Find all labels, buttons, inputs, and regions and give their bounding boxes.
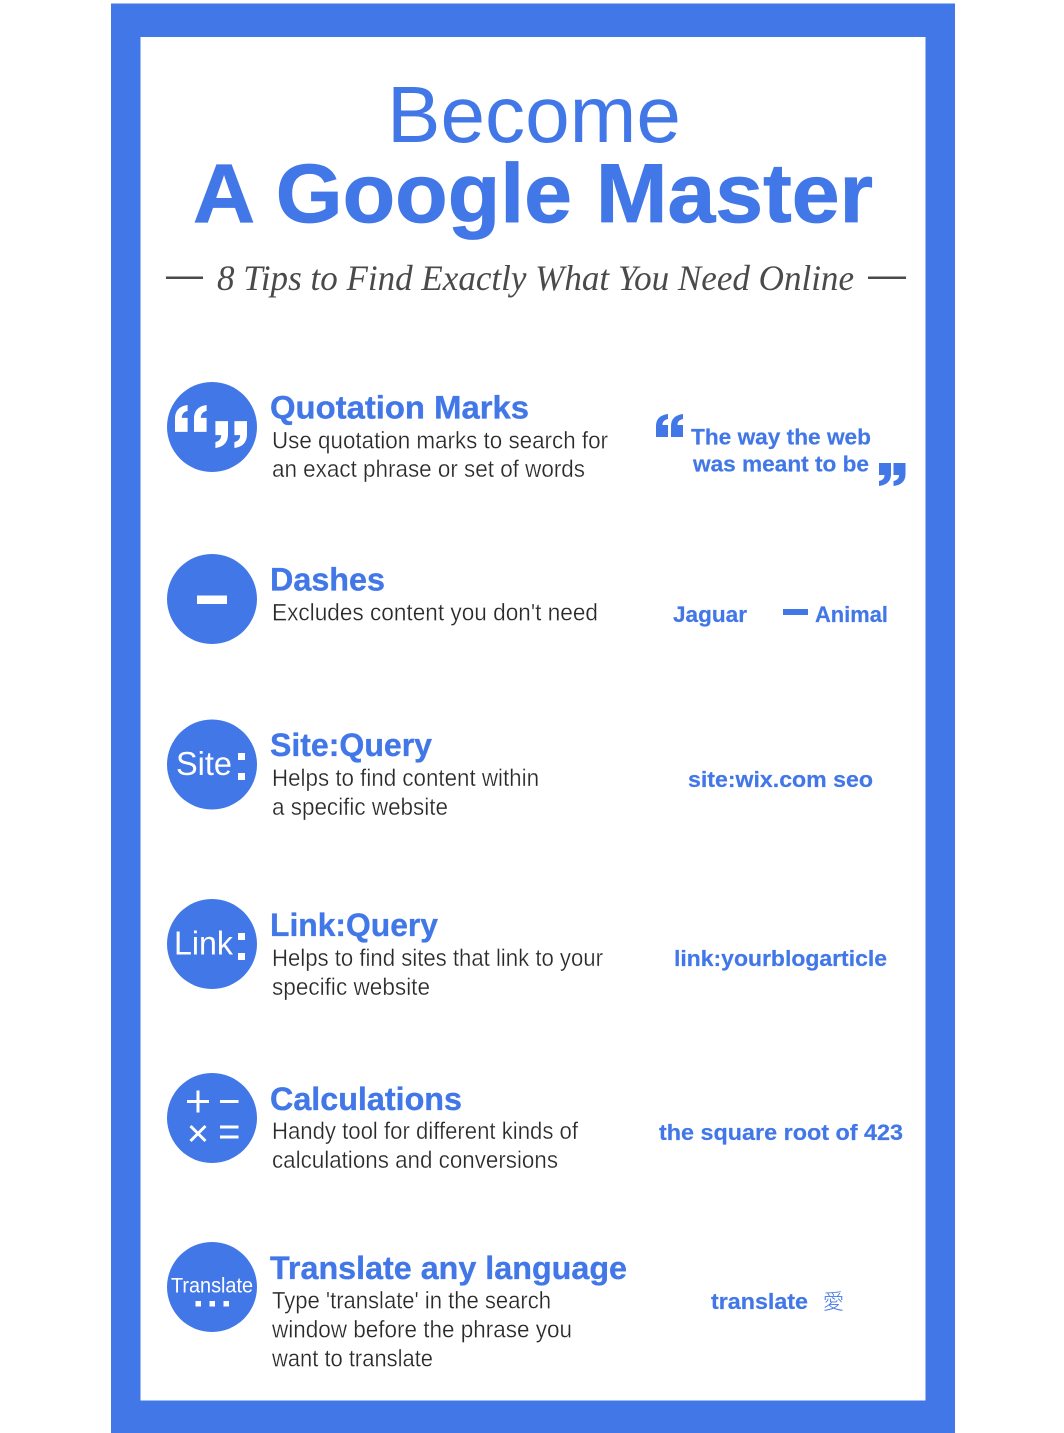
- example: jaguar minus animal: [673, 602, 888, 627]
- title: [193, 70, 873, 240]
- panel: dashes tip: [167, 554, 888, 644]
- example: translate: 愛: [823, 1291, 844, 1314]
- example: quoted phrase: was meant to be: [692, 452, 869, 476]
- example: quoted phrase: [656, 414, 906, 486]
- description: calculations: calculations and conversions: [272, 1147, 558, 1174]
- panel: quotation marks tip: [167, 382, 906, 486]
- description: site query: a specific website: [272, 794, 448, 821]
- icon: dash: [167, 554, 257, 644]
- example: jaguar minus animal: Jaguar: [673, 602, 747, 627]
- description: site query: Helps to find content within: [272, 765, 539, 792]
- heading: calculations: Calculations: [270, 1081, 462, 1117]
- example: calculation: the square root of 423: [659, 1120, 903, 1145]
- heading: dashes: Dashes: [270, 562, 385, 598]
- description: translate: want to translate: [271, 1346, 433, 1372]
- heading: link query: Link:Query: [270, 907, 438, 943]
- example: site query: site:wix.com seo: [688, 767, 873, 792]
- description: quotation marks: Use quotation marks to search for: [272, 428, 608, 454]
- panel: calculations tip: [167, 1073, 903, 1174]
- example: link query: link:yourblogarticle: [674, 946, 887, 971]
- subtitle with side rules: 8 Tips to Find Exactly What You Need Online: [217, 258, 854, 298]
- panel: blue frame with white card: [111, 4, 955, 1433]
- example: quoted phrase: The way the web: [691, 424, 871, 450]
- heading: translate: Translate any language: [270, 1250, 627, 1286]
- description: calculations: Handy tool for different kinds of: [272, 1118, 578, 1145]
- title: Become: [387, 70, 681, 159]
- icon: site colon: Site: [176, 745, 232, 782]
- icon: site colon: [167, 720, 257, 810]
- icon: link colon: [167, 899, 257, 989]
- description: link query: specific website: [272, 974, 430, 1001]
- description: translate: Type 'translate' in the search: [272, 1288, 551, 1314]
- description: link query: Helps to find sites that link to your: [272, 945, 603, 972]
- example: translate: translate: [711, 1289, 808, 1314]
- icon: calculator symbols: [167, 1073, 257, 1163]
- panel: translate tip: [167, 1242, 844, 1372]
- panel: site query tip: [167, 720, 873, 821]
- title: A Google Master: [193, 146, 873, 240]
- description: translate: window before the phrase you: [271, 1316, 572, 1344]
- heading: quotation marks: Quotation Marks: [270, 390, 529, 426]
- example: jaguar minus animal: Animal: [815, 602, 888, 627]
- heading: site query: Site:Query: [270, 727, 432, 763]
- icon: link colon: Link: [174, 924, 233, 962]
- description: quotation marks: an exact phrase or set of words: [272, 456, 585, 483]
- panel: link query tip: [167, 899, 887, 1001]
- icon: quotation marks: [167, 382, 257, 472]
- icon: translate: [167, 1242, 257, 1332]
- description: dashes: Excludes content you don't need: [272, 600, 598, 626]
- icon: translate: Translate: [171, 1274, 253, 1298]
